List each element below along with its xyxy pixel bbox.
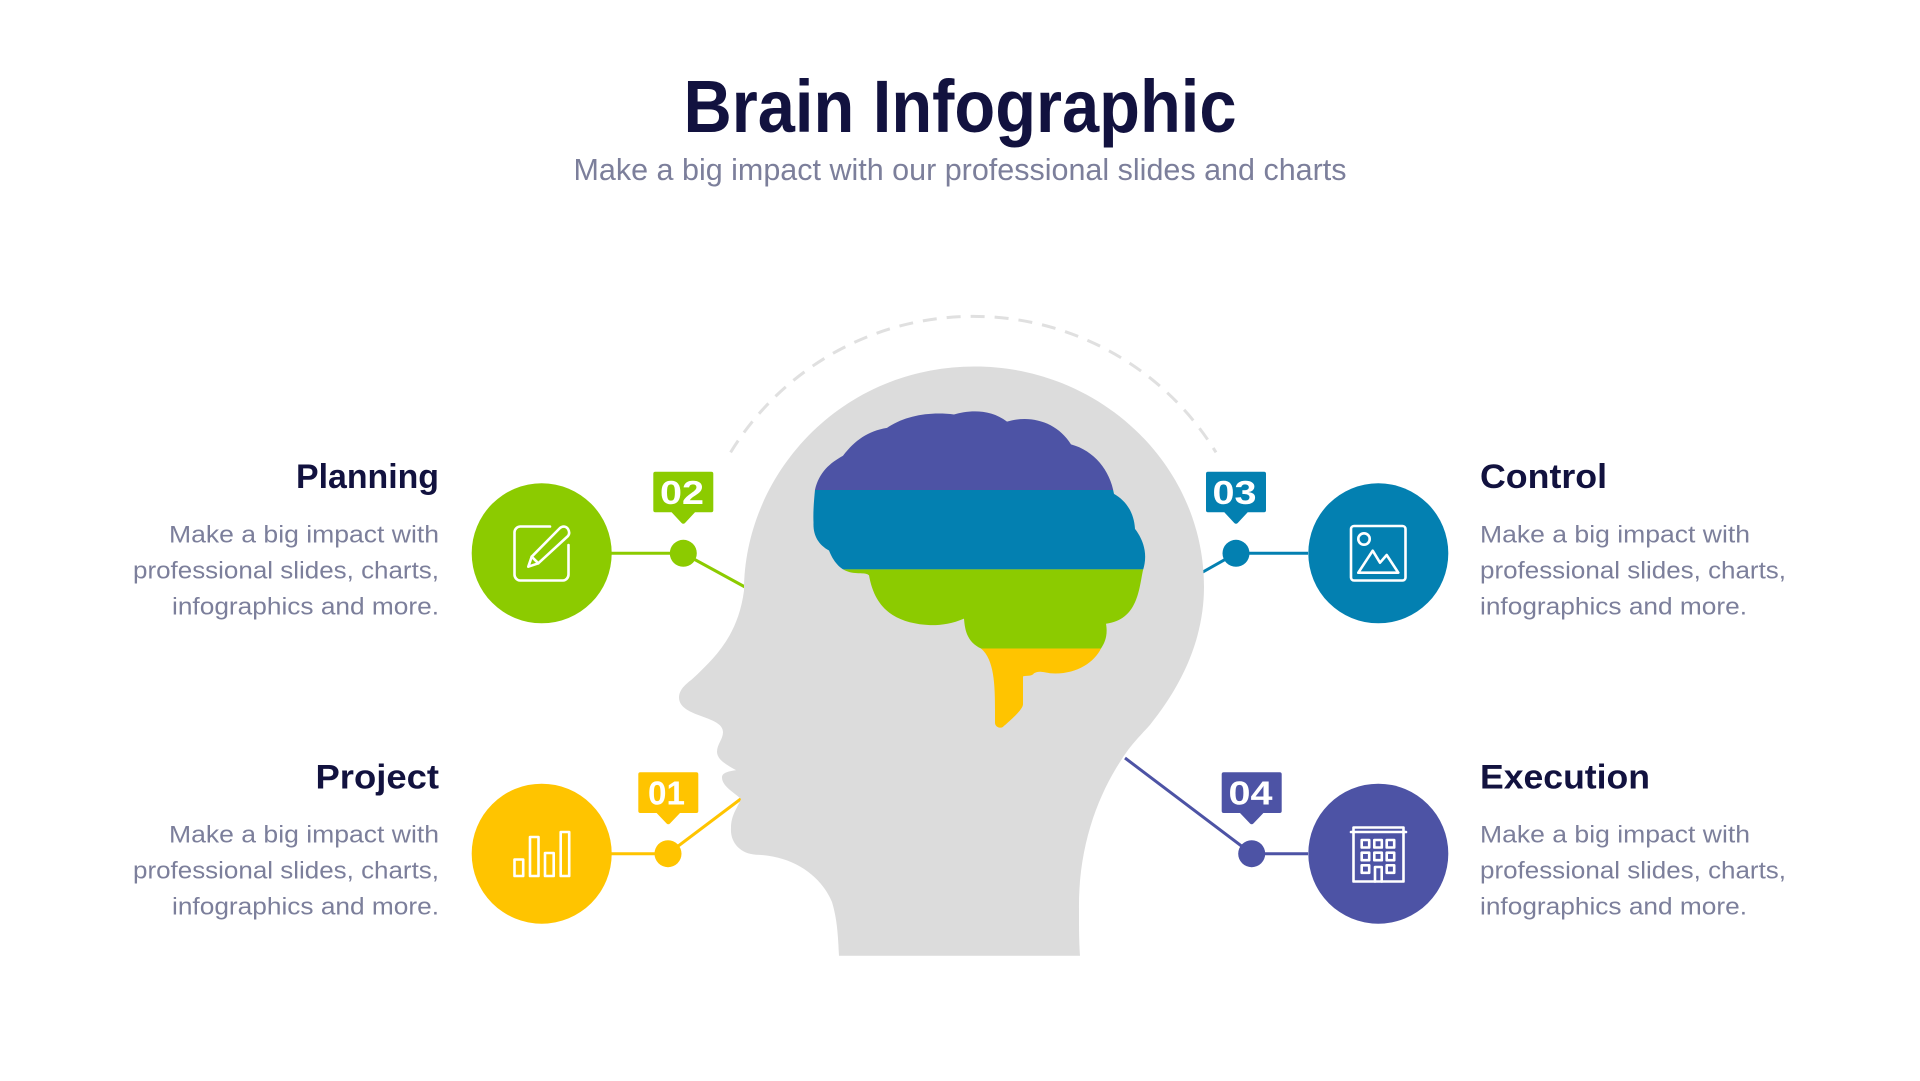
dot: project [654,840,682,867]
text: execution description: Make a big impact with [1480,822,1750,849]
icon: image [1351,526,1406,580]
title: Brain Infographic [684,65,1236,148]
text: execution description [1480,822,1786,921]
connector: project [611,798,742,854]
panel: project [133,758,698,924]
connector: control [1202,553,1308,572]
text: project description [133,822,439,921]
badge: 02: 02 [660,474,704,511]
heading: planning: Planning [296,458,439,496]
icon: bar chart [514,832,569,876]
badge: 04: 04 [1228,775,1273,812]
circle: control [1308,483,1448,623]
text: control description: Make a big impact with [1480,521,1750,548]
connector: execution [1125,758,1308,854]
heading: execution: Execution [1480,758,1650,796]
brain with four colour bands [812,400,1148,738]
dot: control [1222,540,1250,567]
text: control description: infographics and more. [1480,593,1747,620]
connector: planning [611,553,745,587]
badge: 03: 03 [1212,474,1256,511]
heading: control: Control [1480,458,1607,496]
head silhouette [679,367,1204,956]
icon: building [1351,828,1406,882]
circle: project [472,784,612,924]
text: planning description: Make a big impact with [169,521,439,548]
dashed arc above head [731,316,1216,452]
dot: planning [670,540,697,567]
text: execution description: professional slides, charts, [1480,858,1786,885]
text: execution description: infographics and more. [1480,894,1747,921]
badge: 02 [653,472,713,524]
text: planning description [133,521,439,620]
heading: project: Project [316,758,439,796]
text: project description: professional slides, charts, [133,858,439,885]
text: control description [1480,521,1786,620]
badge: 03 [1206,472,1266,524]
text: project description: infographics and more. [172,894,439,921]
text: planning description: infographics and more. [172,593,439,620]
dot: execution [1238,840,1265,867]
text: control description: professional slides, charts, [1480,557,1786,584]
circle: execution [1308,784,1448,924]
text: project description: Make a big impact with [169,822,439,849]
panel: control [1206,458,1786,623]
icon: pencil and note [514,526,569,580]
circle: planning [472,483,612,623]
panel: planning [133,458,713,623]
badge: 04 [1222,772,1282,824]
badge: 01 [638,772,698,824]
text: planning description: professional slides, charts, [133,557,439,584]
badge: 01: 01 [648,775,685,812]
panel: execution [1222,758,1786,924]
subtitle: Make a big impact with our professional slides and charts [574,152,1346,187]
